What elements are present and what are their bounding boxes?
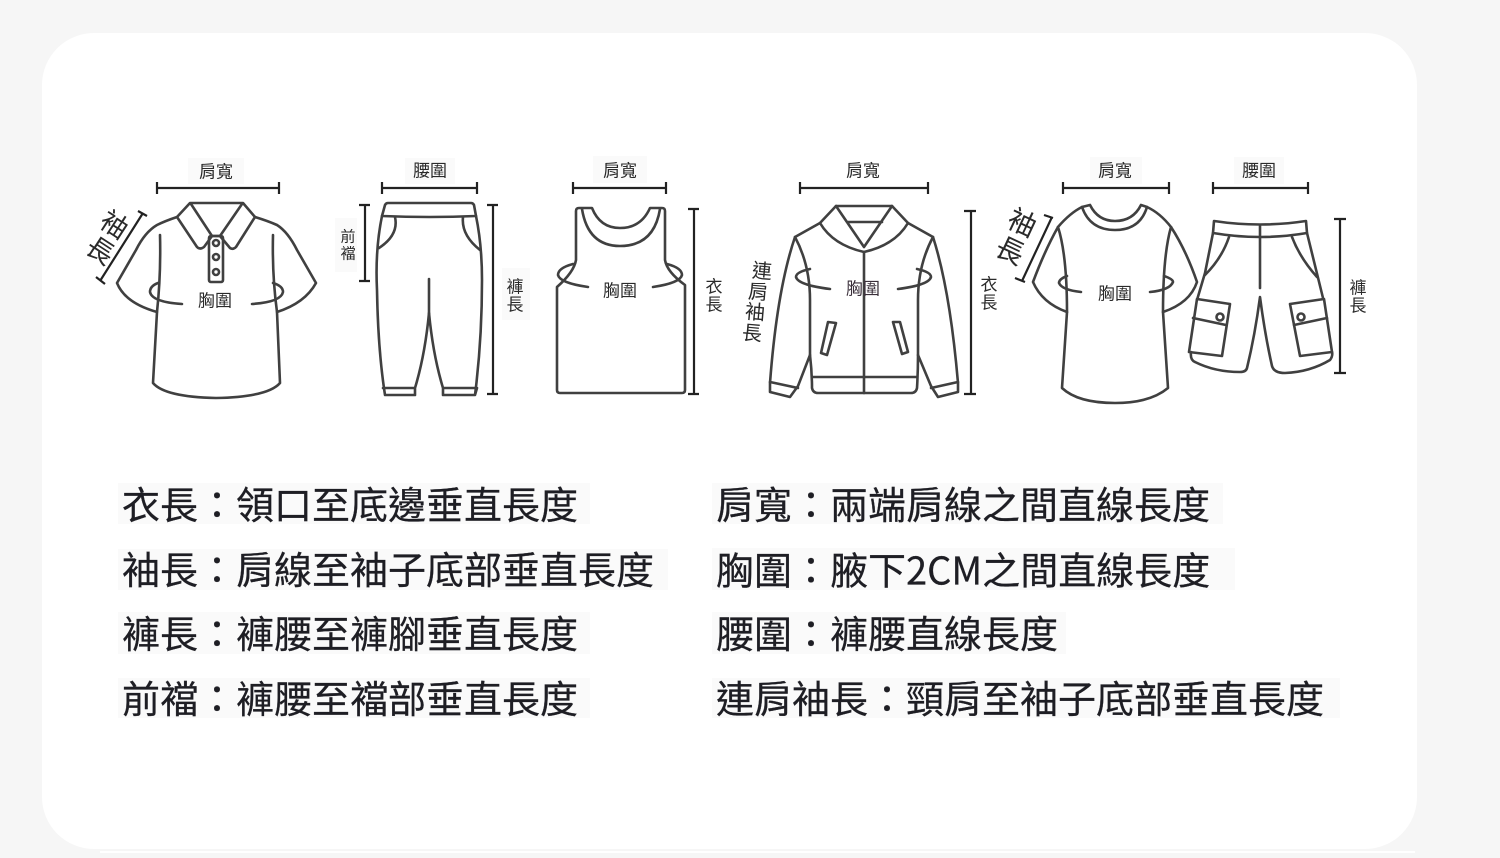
dimension: trousers length: 褲	[506, 278, 524, 296]
dimension: trousers length	[487, 205, 530, 394]
heading: polo shoulder width	[157, 158, 279, 194]
definition: waist: 腰圍：褲腰直線長度	[716, 615, 1058, 657]
dimension: front rise: 襠	[340, 246, 356, 262]
label: tank chest: 胸圍	[603, 282, 637, 300]
dimension: tank length	[688, 209, 722, 394]
heading: tank shoulder width	[573, 156, 666, 194]
definition: sleeve length: 袖長：肩線至袖子底部垂直長度	[122, 551, 654, 593]
heading: jacket shoulder width	[800, 162, 928, 194]
heading: polo shoulder width: 肩寬	[199, 162, 233, 182]
garment: polo shirt	[81, 158, 316, 398]
heading: shorts waist	[1213, 157, 1308, 194]
dimension: polo sleeve length	[81, 205, 147, 284]
dimension: raglan sleeve length: 長	[741, 322, 763, 346]
dimension: polo sleeve length: 袖	[95, 205, 133, 245]
garment: cargo shorts	[1189, 157, 1366, 373]
dimension: jacket length	[964, 211, 998, 394]
heading: trousers waist: 腰圍	[413, 162, 447, 180]
definition: raglan sleeve: 連肩袖長：頸肩至袖子底部垂直長度	[716, 680, 1324, 722]
dimension: raglan sleeve length	[741, 259, 773, 346]
garment: zip jacket	[741, 162, 998, 397]
definition: garment length: 衣長：領口至底邊垂直長度	[122, 486, 578, 528]
heading: tee shoulder width	[1063, 157, 1169, 194]
dimension: tank length: 長	[706, 296, 722, 314]
dimension: tee sleeve length: 長	[991, 231, 1029, 271]
garment: tank top	[557, 156, 722, 394]
definition: shoulder width: 肩寬：兩端肩線之間直線長度	[716, 486, 1210, 528]
dimension: shorts length	[1334, 219, 1366, 373]
definition: chest: 胸圍：腋下2CM之間直線長度	[716, 540, 1210, 596]
icon: tee outline	[1033, 205, 1197, 403]
dimension: tee sleeve length: 袖	[1003, 203, 1041, 243]
dimension: shorts length: 長	[1350, 296, 1366, 316]
text block: right definitions	[712, 483, 1340, 722]
dimension: raglan sleeve length: 袖	[744, 300, 766, 325]
icon: polo outline	[117, 203, 316, 398]
dimension: raglan sleeve length: 肩	[747, 280, 769, 305]
garment: t-shirt	[991, 157, 1197, 403]
heading: shorts waist: 腰圍	[1242, 162, 1276, 180]
dimension: shorts length: 褲	[1350, 278, 1366, 298]
dimension: front rise	[335, 205, 370, 281]
icon: shorts outline	[1189, 221, 1332, 373]
garment: long trousers	[335, 158, 530, 395]
heading: tank shoulder width: 肩寬	[603, 162, 637, 180]
dimension: trousers length: 長	[506, 296, 524, 314]
dimension: polo sleeve length: 長	[81, 231, 119, 271]
dimension: jacket length: 衣	[980, 276, 998, 294]
icon: tank outline	[557, 208, 685, 393]
label: jacket chest: 胸圍	[846, 280, 880, 298]
definition: front rise: 前襠：褲腰至襠部垂直長度	[122, 680, 578, 722]
text block: left definitions	[118, 483, 668, 722]
label: tee chest: 胸圍	[1098, 284, 1132, 304]
heading: trousers waist	[382, 158, 477, 194]
dimension: raglan sleeve length: 連	[751, 259, 773, 284]
heading: tee shoulder width: 肩寬	[1098, 162, 1132, 180]
label: polo chest: 胸圍	[198, 292, 232, 310]
definition: trousers length: 褲長：褲腰至褲腳垂直長度	[122, 615, 578, 657]
dimension: tee sleeve length	[991, 203, 1053, 282]
dimension: jacket length: 長	[980, 294, 998, 312]
heading: jacket shoulder width: 肩寬	[846, 162, 880, 180]
dimension: front rise: 前	[340, 228, 356, 246]
icon: jacket outline	[770, 206, 958, 397]
dimension: tank length: 衣	[706, 278, 722, 296]
icon: trousers outline	[377, 203, 482, 395]
